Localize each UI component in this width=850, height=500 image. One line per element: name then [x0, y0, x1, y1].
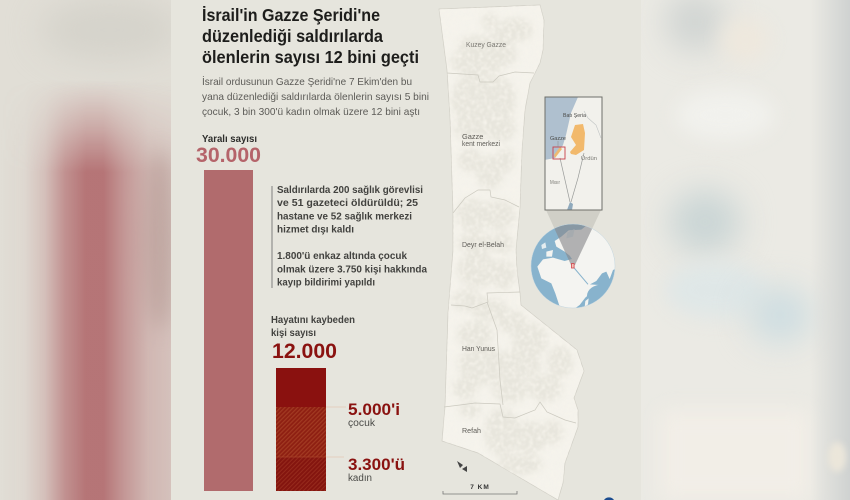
- callout: health workers and missing people: Saldırılarda 200 sağlık görevlisi: [277, 185, 423, 196]
- bar: wounded: [204, 170, 253, 491]
- cone over globe: [554, 224, 592, 265]
- map label: Gazze kent merkezi: Gazze: [462, 132, 483, 141]
- callout: women: [326, 455, 405, 484]
- stacked bar: deaths: [276, 368, 326, 491]
- intro text: çocuk, 3 bin 300'ü kadın olmak üzere 12 bini aştı: [202, 107, 420, 118]
- heading: wounded count: 30.000: [196, 143, 261, 167]
- inset map: region locator: Ürdün: [581, 155, 597, 162]
- icon: north arrow: [457, 461, 467, 472]
- callout: women: 3.300'ü: [348, 455, 405, 474]
- callout: women: kadın: [348, 473, 372, 484]
- map: Gaza Strip: [438, 4, 586, 500]
- intro text: İsrail ordusunun Gazze Şeridi'ne 7 Ekim'den bu: [202, 75, 412, 88]
- callout: children: 5.000'i: [348, 400, 400, 419]
- inset map: region locator: Batı Şeria: [563, 113, 587, 119]
- map label: Gazze kent merkezi: kent merkezi: [462, 139, 500, 148]
- heading: death count: [271, 315, 355, 363]
- scale bar: 7 km: 7 KM: [470, 484, 490, 491]
- callout: health workers and missing people: ve 51 gazeteci öldürüldü; 25: [277, 198, 418, 209]
- urban texture: [450, 13, 573, 475]
- blurred background: right side: [640, 0, 850, 500]
- heading: death count: kişi sayısı: [271, 328, 316, 339]
- callout: health workers and missing people: hizmet dışı kaldı: [277, 224, 354, 236]
- connector cone from inset to globe: [546, 210, 601, 265]
- title: İsrail'in Gazze Şeridi'ne: [202, 5, 380, 25]
- heading: death count: 12.000: [272, 339, 337, 363]
- intro text: yana düzenlediği saldırılarda ölenlerin sayısı 5 bini: [202, 92, 429, 103]
- map label: Kuzey Gazze: Kuzey Gazze: [466, 40, 506, 49]
- callout: health workers and missing people: [272, 185, 427, 288]
- globe locator: [530, 224, 616, 308]
- blurred background: left side: [0, 0, 180, 500]
- callout: health workers and missing people: 1.800'ü enkaz altında çocuk: [277, 251, 407, 262]
- callout: health workers and missing people: olmak üzere 3.750 kişi hakkında: [277, 264, 427, 276]
- map label: Gazze kent merkezi: [462, 132, 500, 148]
- map label: Refah: Refah: [462, 426, 481, 435]
- inset map: region locator: Gazze: [550, 136, 566, 142]
- map label: Han Yunus: Han Yunus: [462, 344, 495, 353]
- icon: logo dot: [604, 497, 614, 500]
- scale bar: 7 km: [443, 484, 517, 494]
- title: düzenlediği saldırılarda: [202, 26, 383, 46]
- callout: health workers and missing people: kayıp bildirimi yapıldı: [277, 278, 375, 288]
- callout: children: çocuk: [348, 418, 376, 429]
- governorate borders: [444, 72, 576, 423]
- heading: death count: Hayatını kaybeden: [271, 315, 355, 326]
- intro text: [202, 75, 429, 118]
- title: ölenlerin sayısı 12 bini geçti: [202, 47, 419, 67]
- inset map: region locator: [544, 97, 602, 210]
- map label: Deyr el-Belah: Deyr el-Belah: [462, 240, 504, 249]
- light speckle: [438, 4, 586, 500]
- inset map: region locator: Mısır: [550, 180, 560, 186]
- title: [202, 5, 419, 67]
- callout: children: [326, 400, 400, 429]
- heading: wounded count: Yaralı sayısı: [202, 134, 257, 145]
- central panel background: [171, 0, 641, 500]
- callout: health workers and missing people: hastane ve 52 sağlık merkezi: [277, 212, 412, 222]
